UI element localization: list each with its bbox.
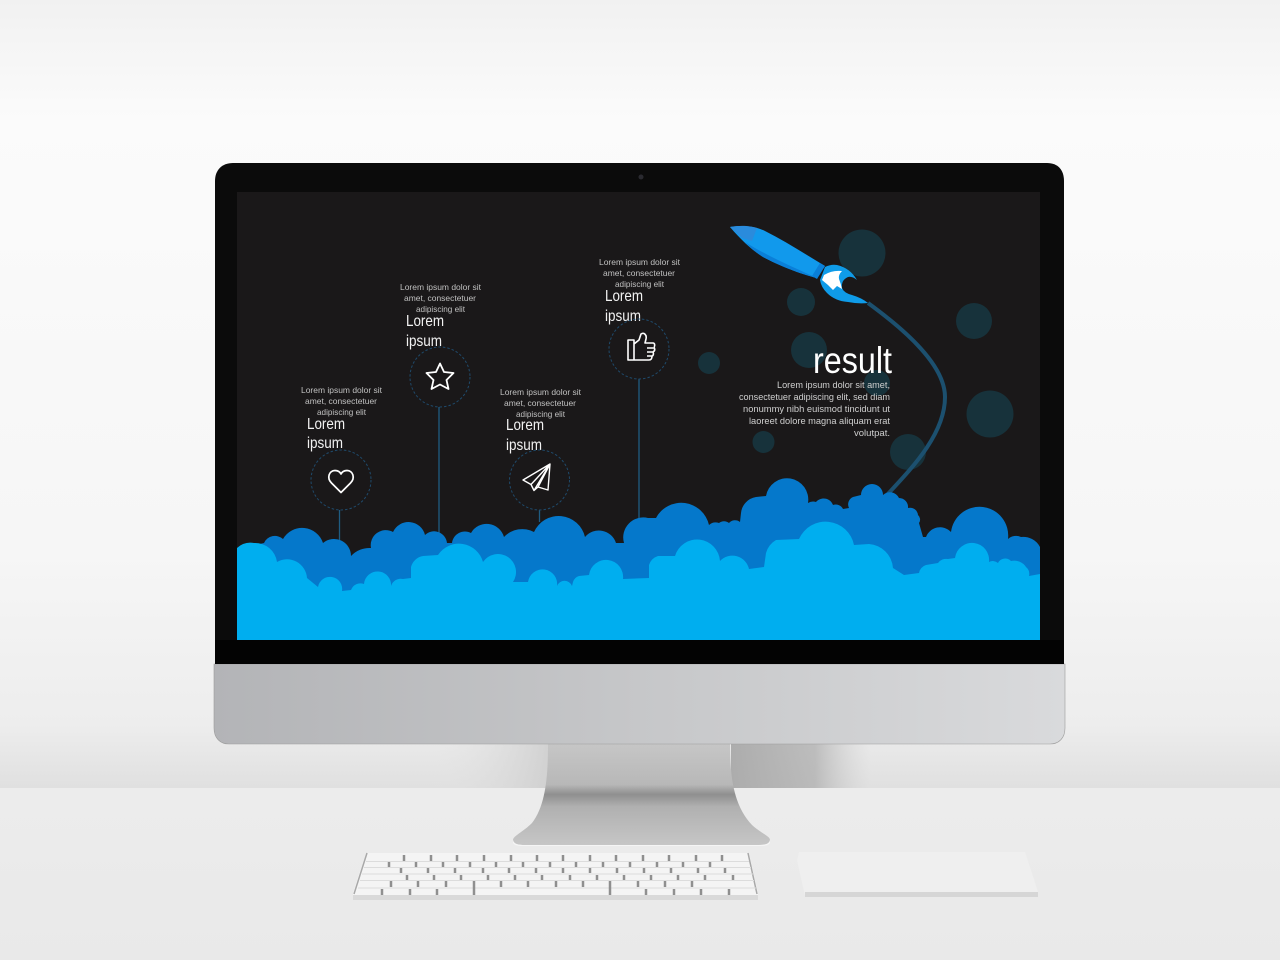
desk surface — [0, 788, 1280, 960]
keyboard edge — [353, 895, 758, 900]
caption: adipiscing elit — [615, 279, 665, 289]
dashed ring — [311, 450, 371, 510]
body text: volutpat. — [854, 428, 890, 439]
trackpad — [797, 852, 1038, 897]
monitor shadow — [430, 744, 871, 788]
label: ipsum — [307, 435, 343, 452]
dark cloud layer — [237, 478, 1040, 610]
item: heart — [301, 385, 383, 510]
label: ipsum — [605, 308, 641, 325]
bottom bezel black — [215, 640, 1064, 664]
body text: consectetuer adipiscing elit, sed diam — [739, 392, 890, 403]
light cloud layer — [237, 522, 1040, 640]
slide screen — [237, 192, 1040, 640]
background bubbles — [698, 230, 1014, 470]
body text: nonummy nibh euismod tincidunt ut — [743, 404, 890, 415]
caption: Lorem ipsum dolor sit — [500, 387, 582, 397]
label: Lorem — [605, 288, 643, 305]
keyboard side edges — [354, 853, 757, 894]
label: Lorem — [406, 313, 444, 330]
icon: paper plane — [523, 464, 550, 490]
rocket — [730, 226, 868, 303]
label — [307, 416, 345, 452]
camera — [638, 174, 644, 180]
item: thumbs up — [599, 257, 681, 379]
rocket body — [730, 226, 825, 278]
body text: laoreet dolore magna aliquam erat — [749, 416, 890, 427]
dashed ring — [609, 319, 669, 379]
caption — [301, 385, 383, 417]
caption: amet, consectetuer — [404, 293, 476, 303]
caption — [500, 387, 582, 419]
label — [406, 313, 444, 350]
monitor stand — [513, 744, 770, 846]
heading and body text — [739, 340, 893, 439]
label — [506, 417, 544, 454]
label: Lorem — [307, 416, 345, 433]
icon: heart — [329, 470, 353, 492]
keyboard — [353, 853, 758, 900]
label: ipsum — [406, 333, 442, 350]
item: paper plane — [500, 387, 582, 510]
keyboard base — [353, 853, 758, 900]
caption: Lorem ipsum dolor sit — [400, 282, 482, 292]
rocket flame — [822, 271, 842, 290]
rocket nose — [730, 226, 757, 241]
monitor bezel — [215, 163, 1064, 664]
icon: star — [426, 364, 454, 389]
rocket nozzle — [812, 263, 825, 279]
rocket trail — [868, 303, 945, 496]
caption — [400, 282, 482, 314]
monitor chin — [214, 664, 1065, 744]
caption: adipiscing elit — [516, 409, 566, 419]
caption: adipiscing elit — [416, 304, 466, 314]
label: ipsum — [506, 437, 542, 454]
caption — [599, 257, 681, 289]
dashed ring — [510, 450, 570, 510]
caption: adipiscing elit — [317, 407, 367, 417]
key gaps — [382, 855, 733, 895]
icon: thumbs up — [628, 333, 655, 360]
label: Lorem — [506, 417, 544, 434]
heading: result: result — [813, 340, 893, 381]
dashed ring — [410, 347, 470, 407]
label — [605, 288, 643, 325]
key rows — [358, 862, 756, 888]
body text: Lorem ipsum dolor sit amet, — [777, 380, 890, 391]
caption: Lorem ipsum dolor sit — [599, 257, 681, 267]
slide background — [237, 192, 1040, 640]
item: star — [400, 282, 482, 407]
caption: Lorem ipsum dolor sit — [301, 385, 383, 395]
caption: amet, consectetuer — [603, 268, 675, 278]
body text — [739, 380, 890, 439]
stems — [340, 379, 639, 548]
rocket fins — [820, 265, 868, 303]
caption: amet, consectetuer — [504, 398, 576, 408]
rocket shading — [745, 242, 817, 278]
caption: amet, consectetuer — [305, 396, 377, 406]
